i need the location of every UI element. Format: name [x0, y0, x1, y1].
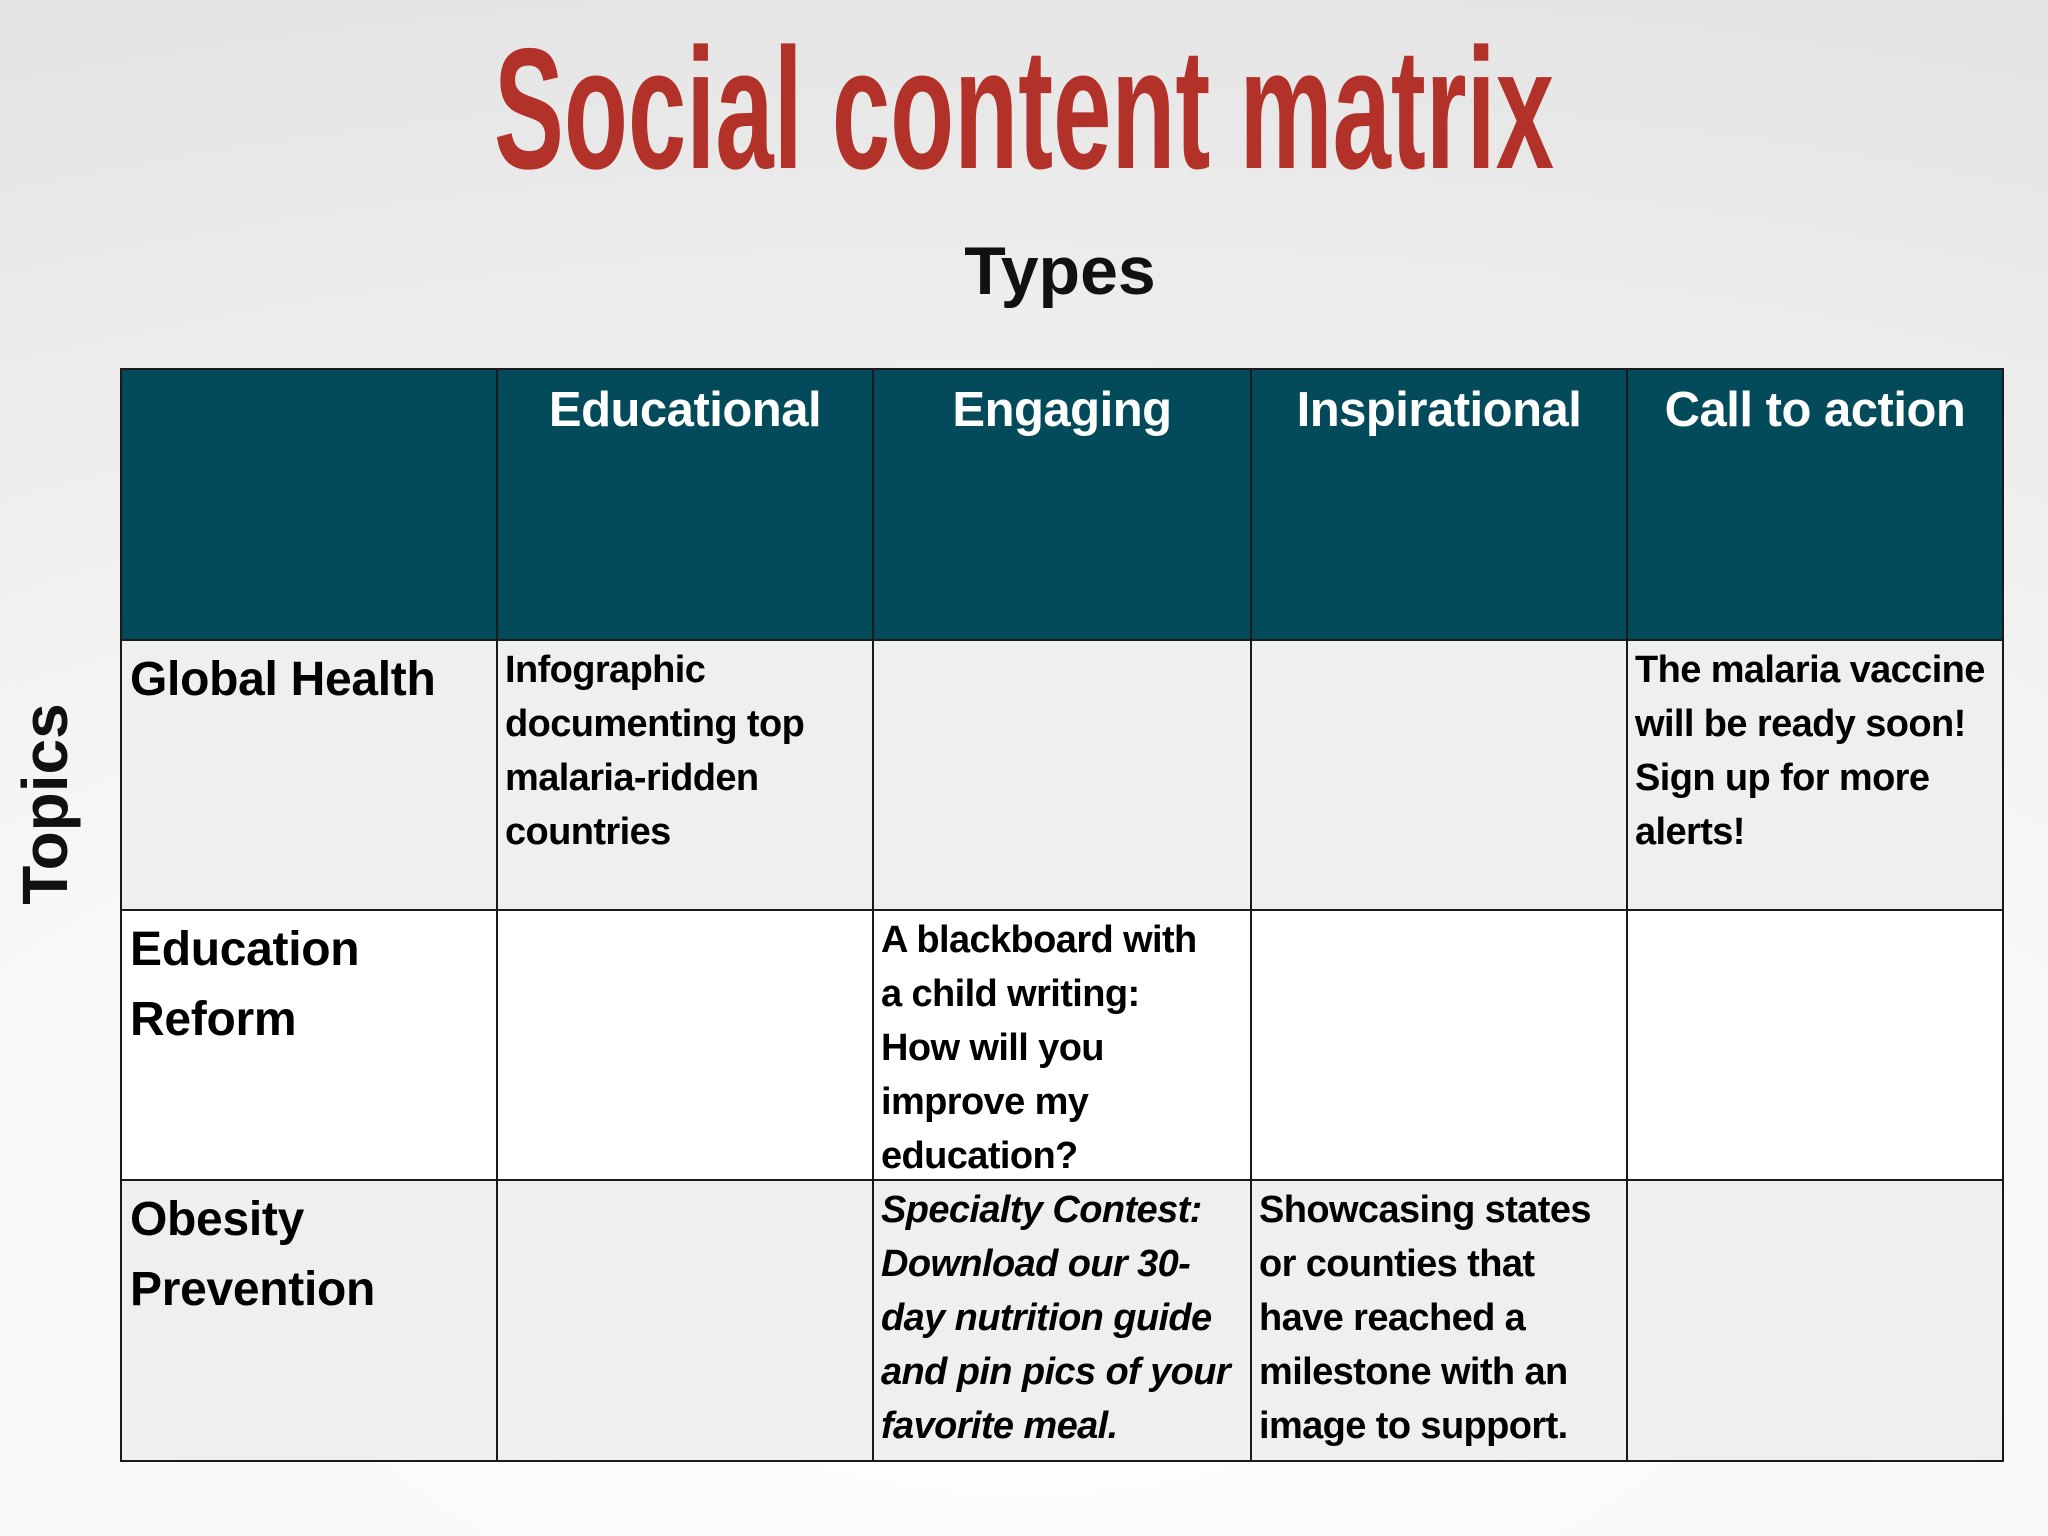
row: Global Health: Global Health	[130, 653, 435, 706]
row: Global Health	[121, 640, 2003, 910]
row: Obesity Prevention: Obesity	[130, 1193, 304, 1246]
row: Education Reform: Education	[130, 923, 359, 976]
row: Obesity Prevention: favorite meal.	[881, 1405, 1118, 1447]
heading: Topics (rotated): Topics	[9, 703, 81, 905]
header row: Call to action	[1665, 383, 1965, 437]
row: Education Reform	[121, 910, 2003, 1180]
row: Global Health: The malaria vaccine	[1635, 649, 1985, 691]
row: Global Health: documenting top	[505, 703, 804, 745]
row: Global Health: will be ready soon!	[1635, 703, 1966, 745]
heading: Types: Types	[964, 233, 1156, 309]
row: Obesity Prevention: have reached a	[1259, 1297, 1525, 1339]
row: Obesity Prevention: and pin pics of your	[881, 1351, 1230, 1393]
header row	[122, 370, 2002, 1460]
header row: Engaging	[952, 383, 1172, 437]
row: Obesity Prevention: image to support.	[1259, 1405, 1568, 1447]
row: Obesity Prevention: day nutrition guide	[881, 1297, 1212, 1339]
header row: Educational	[549, 383, 821, 437]
row: Education Reform: How will you	[881, 1027, 1104, 1069]
row: Obesity Prevention: Prevention	[130, 1263, 375, 1316]
matrix table	[120, 368, 2004, 1462]
row: Obesity Prevention: Download our 30-	[881, 1243, 1190, 1285]
row: Obesity Prevention: or counties that	[1259, 1243, 1534, 1285]
row: Global Health: malaria-ridden	[505, 757, 758, 799]
row: Global Health: alerts!	[1635, 811, 1745, 853]
row: Obesity Prevention: Specialty Contest:	[881, 1189, 1202, 1231]
row: Global Health: Sign up for more	[1635, 757, 1929, 799]
row: Global Health: countries	[505, 811, 671, 853]
row: Education Reform: A blackboard with	[881, 919, 1197, 961]
row: Education Reform: improve my	[881, 1081, 1088, 1123]
row: Obesity Prevention: Showcasing states	[1259, 1189, 1591, 1231]
row: Education Reform: Reform	[130, 993, 296, 1046]
row: Education Reform: a child writing:	[881, 973, 1140, 1015]
row: Global Health: Infographic	[505, 649, 705, 691]
header row: Inspirational	[1297, 383, 1581, 437]
row: Obesity Prevention	[121, 1180, 2003, 1461]
row: Obesity Prevention: milestone with an	[1259, 1351, 1568, 1393]
